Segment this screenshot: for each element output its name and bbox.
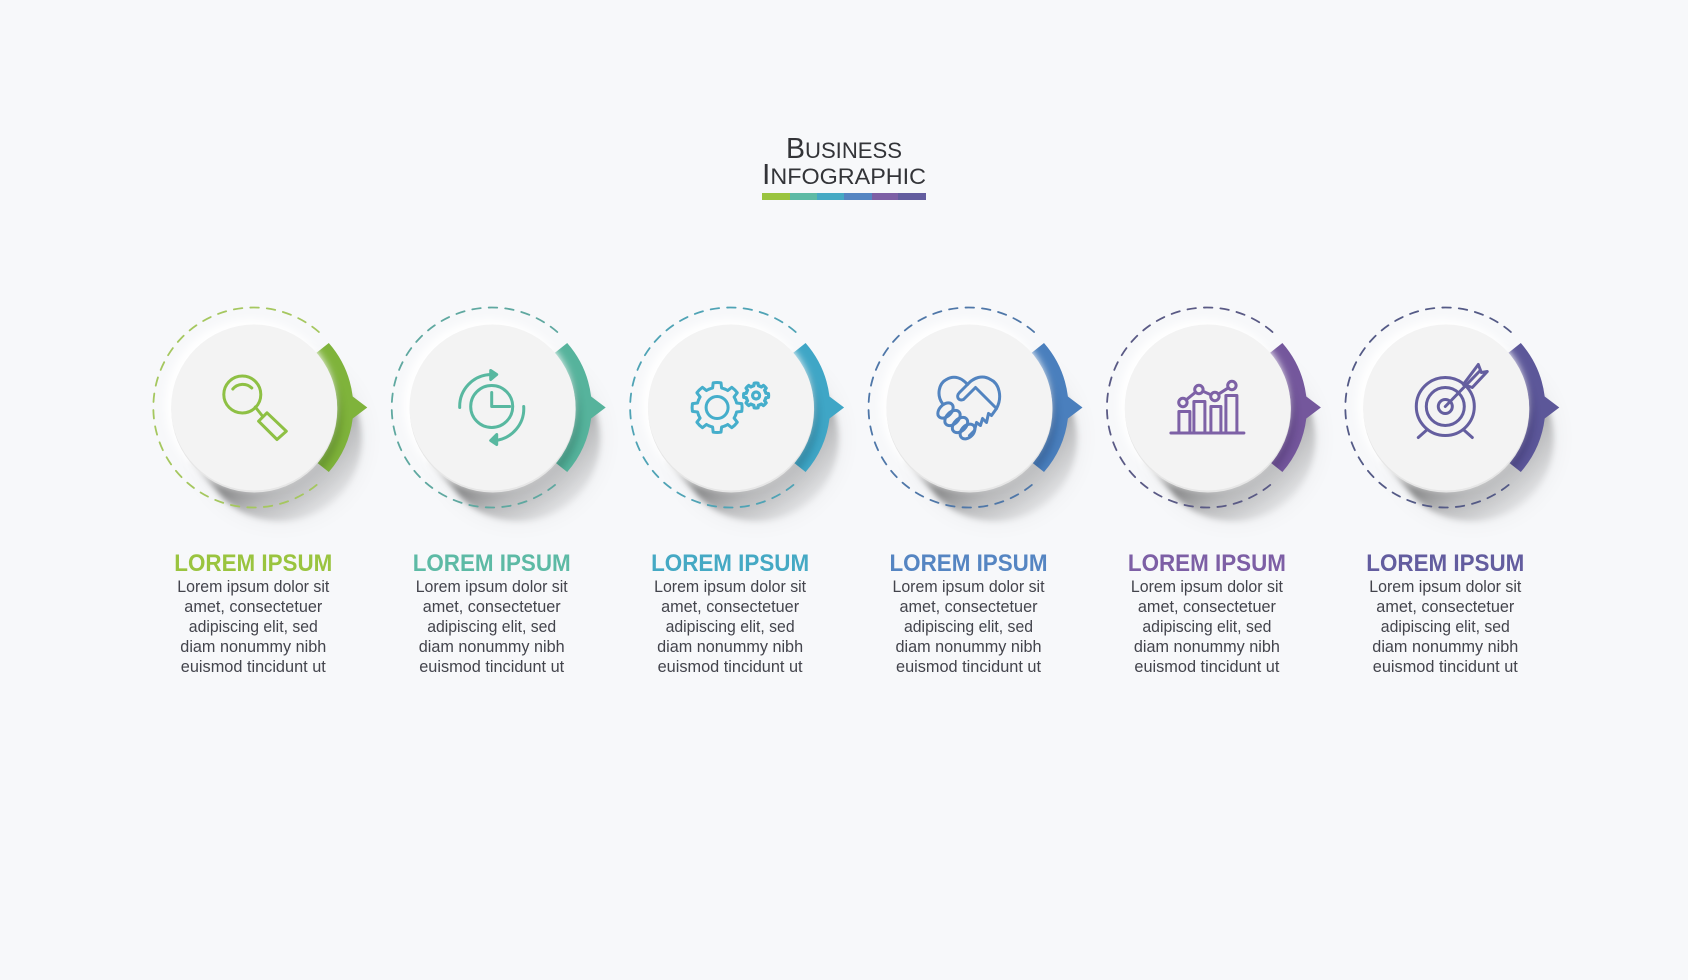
icon: gears xyxy=(692,383,769,432)
text block: diam nonummy nibh xyxy=(1134,638,1280,656)
text block: diam nonummy nibh xyxy=(657,638,803,656)
text block: adipiscing elit, sed xyxy=(1381,618,1510,636)
title: BUSINESS xyxy=(786,133,902,165)
text block: amet, consectetuer xyxy=(184,598,323,616)
icon: magnifying glass xyxy=(224,376,286,440)
text block: euismod tincidunt ut xyxy=(896,658,1041,676)
text block: Lorem ipsum dolor sit xyxy=(177,578,330,596)
heading: LOREM IPSUM xyxy=(651,550,809,577)
text block: euismod tincidunt ut xyxy=(181,658,326,676)
icon: bar chart with trend line xyxy=(1171,381,1244,433)
text block: amet, consectetuer xyxy=(900,598,1038,616)
text block xyxy=(1131,578,1283,676)
text block: adipiscing elit, sed xyxy=(666,618,795,636)
heading: LOREM IPSUM xyxy=(1366,550,1524,577)
title: INFOGRAPHIC xyxy=(762,159,926,191)
text block: Lorem ipsum dolor sit xyxy=(1369,578,1522,596)
panel: step 4 partnership xyxy=(869,308,1082,676)
heading: LOREM IPSUM xyxy=(174,550,332,577)
title xyxy=(762,133,926,191)
text block: diam nonummy nibh xyxy=(1372,638,1518,656)
heading: LOREM IPSUM xyxy=(413,550,571,577)
text block xyxy=(416,578,568,676)
panel: step 6 target xyxy=(1345,308,1559,676)
text block: Lorem ipsum dolor sit xyxy=(1131,578,1283,596)
title colour bar xyxy=(762,193,926,200)
heading: LOREM IPSUM xyxy=(1128,550,1286,577)
text block: euismod tincidunt ut xyxy=(1134,658,1280,676)
text block xyxy=(654,578,806,676)
text block xyxy=(177,578,330,676)
panel: step 5 growth chart xyxy=(1107,308,1321,676)
text block: diam nonummy nibh xyxy=(419,638,565,656)
icon: handshake heart xyxy=(935,377,1000,442)
text block: amet, consectetuer xyxy=(1376,598,1515,616)
text block: euismod tincidunt ut xyxy=(1373,658,1518,676)
text block: euismod tincidunt ut xyxy=(658,658,803,676)
text block: adipiscing elit, sed xyxy=(189,618,318,636)
text block: amet, consectetuer xyxy=(423,598,561,616)
text block xyxy=(892,578,1045,676)
text block: diam nonummy nibh xyxy=(180,638,326,656)
panel: step 3 settings xyxy=(630,308,844,676)
text block: euismod tincidunt ut xyxy=(419,658,565,676)
text block: Lorem ipsum dolor sit xyxy=(416,578,568,596)
text block: amet, consectetuer xyxy=(1138,598,1276,616)
icon: target with arrow xyxy=(1416,364,1487,438)
text block: diam nonummy nibh xyxy=(896,638,1042,656)
text block: adipiscing elit, sed xyxy=(1142,618,1271,636)
panel: step 2 time xyxy=(392,308,606,676)
text block: Lorem ipsum dolor sit xyxy=(892,578,1045,596)
heading: LOREM IPSUM xyxy=(890,550,1048,577)
text block xyxy=(1369,578,1522,676)
text block: amet, consectetuer xyxy=(661,598,800,616)
icon: clock with arrows xyxy=(460,370,524,444)
panel: step 1 search xyxy=(153,308,367,676)
text block: Lorem ipsum dolor sit xyxy=(654,578,806,596)
text block: adipiscing elit, sed xyxy=(427,618,556,636)
text block: adipiscing elit, sed xyxy=(904,618,1033,636)
